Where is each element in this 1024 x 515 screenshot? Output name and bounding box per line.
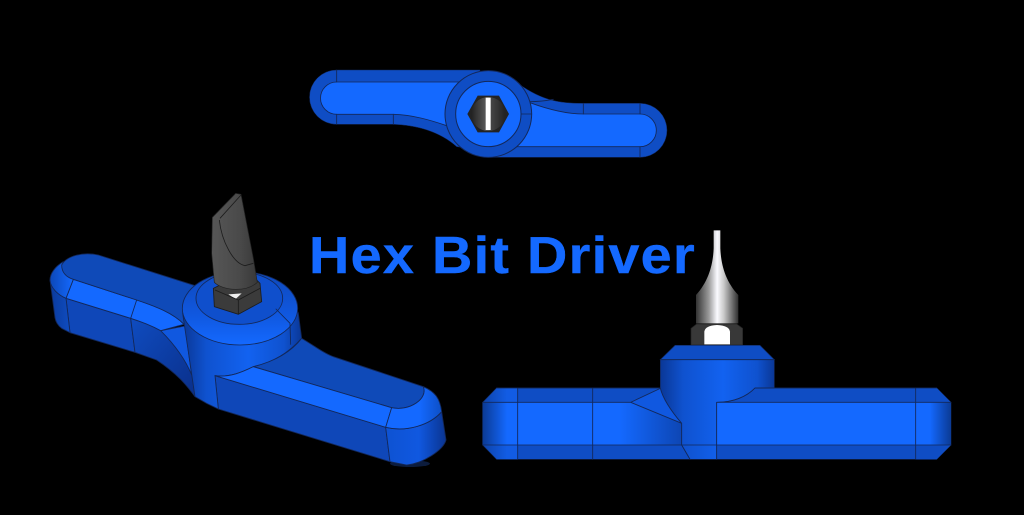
isometric view of driver <box>50 193 446 467</box>
bit end <box>471 97 505 131</box>
handle center band <box>518 402 916 445</box>
right arm outer band <box>487 80 667 157</box>
bit shaft and blade <box>212 193 257 289</box>
shadow <box>390 460 430 467</box>
left arm top face <box>321 82 473 126</box>
outline details <box>483 360 951 459</box>
hub inner face <box>456 81 521 147</box>
right arm top face <box>500 103 656 147</box>
band right cap <box>916 388 951 459</box>
left arm top face <box>62 254 198 324</box>
title: Hex Bit Driver <box>309 227 696 285</box>
slot tip <box>486 98 491 130</box>
right cap chamfer <box>386 387 442 429</box>
left arm outer band <box>310 70 480 150</box>
hub top chamfer <box>660 345 774 360</box>
web face <box>161 326 192 375</box>
hub chamfer <box>182 272 298 345</box>
hub body <box>660 360 774 459</box>
right arm top face <box>253 338 424 408</box>
right arm side wall <box>215 376 390 462</box>
band left cap <box>483 402 518 445</box>
hub <box>445 71 532 157</box>
bit <box>212 193 262 314</box>
bit taper <box>696 230 738 323</box>
hub top face <box>196 272 283 324</box>
web triangle <box>631 388 682 423</box>
right end wall <box>386 412 446 465</box>
left arm side wall <box>66 298 135 352</box>
hex socket <box>467 96 509 132</box>
right arm chamfer <box>215 367 392 427</box>
handle body <box>483 388 951 459</box>
left arm chamfer <box>66 279 184 331</box>
nut face <box>704 325 730 344</box>
hex base <box>213 280 262 314</box>
left cap chamfer <box>50 262 73 298</box>
hex edges and white socket glint <box>228 293 242 299</box>
hub body <box>183 302 302 409</box>
left arm curved wall <box>131 318 195 397</box>
left end wall <box>50 280 70 333</box>
side view of driver <box>483 230 951 459</box>
hex nut <box>691 324 743 345</box>
top view of driver <box>310 70 667 157</box>
handle left end <box>483 388 518 459</box>
